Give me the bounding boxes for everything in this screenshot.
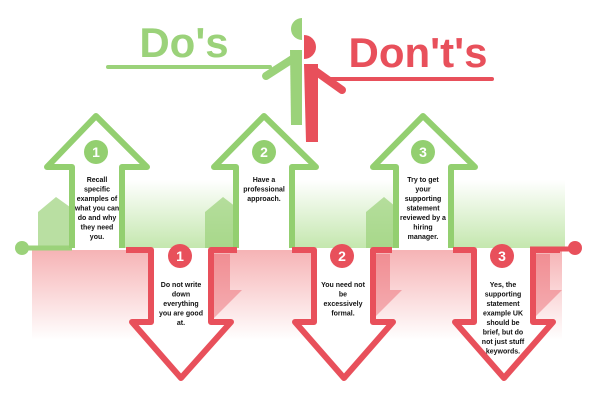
up arrow 1: do and why	[78, 215, 116, 222]
up arrow 3: your	[415, 186, 431, 194]
down arrow 3: keywords.	[486, 348, 520, 356]
up arrow 3: supporting	[405, 196, 441, 203]
down arrow 3: brief, but do	[483, 330, 523, 336]
up arrow 3: statement	[406, 206, 440, 212]
timeline: green line with dot	[15, 241, 72, 255]
up arrow 2: approach.	[247, 196, 281, 203]
down arrow 3: not just stuff	[482, 339, 525, 346]
up arrow 3: manager.	[408, 234, 438, 241]
up arrow 3	[373, 116, 475, 248]
title: Do's: Do's	[139, 19, 229, 66]
up arrow 1: you.	[90, 234, 104, 241]
down arrow 1	[126, 244, 237, 378]
down arrow 1: 1	[176, 248, 184, 264]
title: Don't's: Don't's	[349, 29, 487, 76]
down arrow 1: down	[172, 292, 190, 298]
up arrow 2: Have a	[253, 177, 275, 184]
red title underline	[330, 77, 492, 81]
down arrow 3: 3	[498, 248, 506, 264]
up arrow 1: Recall	[87, 177, 107, 184]
down arrow 3: should be	[486, 320, 520, 327]
up arrow 1	[47, 116, 147, 248]
up arrow 3: reviewed by a	[400, 215, 446, 222]
down arrow 3: Yes, the	[490, 282, 516, 289]
up arrow 2	[214, 116, 316, 248]
down arrow 2: be	[339, 292, 347, 298]
down arrow 2: You need not	[321, 282, 366, 289]
up arrow 1: 1	[92, 144, 100, 160]
down arrow 1: Do not write	[161, 282, 201, 289]
green background band	[122, 180, 565, 248]
down arrow 3: supporting	[485, 292, 521, 298]
up arrow 3: Try to get	[407, 177, 439, 184]
up arrow 2: professional	[243, 186, 285, 194]
up arrow 3: 3	[419, 144, 427, 160]
up arrow 1: specific	[84, 186, 110, 194]
icon: split person	[266, 18, 342, 142]
decorative red mini arrows	[212, 254, 562, 318]
down arrow 1: at.	[177, 320, 185, 327]
down arrow 2	[292, 244, 393, 378]
down arrow 2: excessively	[324, 301, 363, 308]
down arrow 2: formal.	[331, 310, 355, 318]
down arrow 1: you are good	[159, 310, 203, 318]
down arrow 2: 2	[338, 248, 346, 264]
red background band	[32, 250, 562, 340]
down arrow 3: statement	[486, 301, 520, 308]
green title underline	[108, 65, 270, 69]
up arrow 2: 2	[260, 144, 268, 160]
up arrow 1: what you can	[74, 206, 119, 212]
up arrow 1: they need	[81, 224, 113, 232]
down arrow 3: example UK	[483, 310, 523, 318]
up arrow 3: hiring	[413, 224, 433, 232]
up arrow 1: examples of	[77, 196, 118, 203]
down arrow 3	[453, 244, 560, 378]
down arrow 1: everything	[163, 301, 199, 308]
timeline: red line with dot	[530, 241, 582, 255]
decorative green mini arrows	[38, 197, 396, 248]
